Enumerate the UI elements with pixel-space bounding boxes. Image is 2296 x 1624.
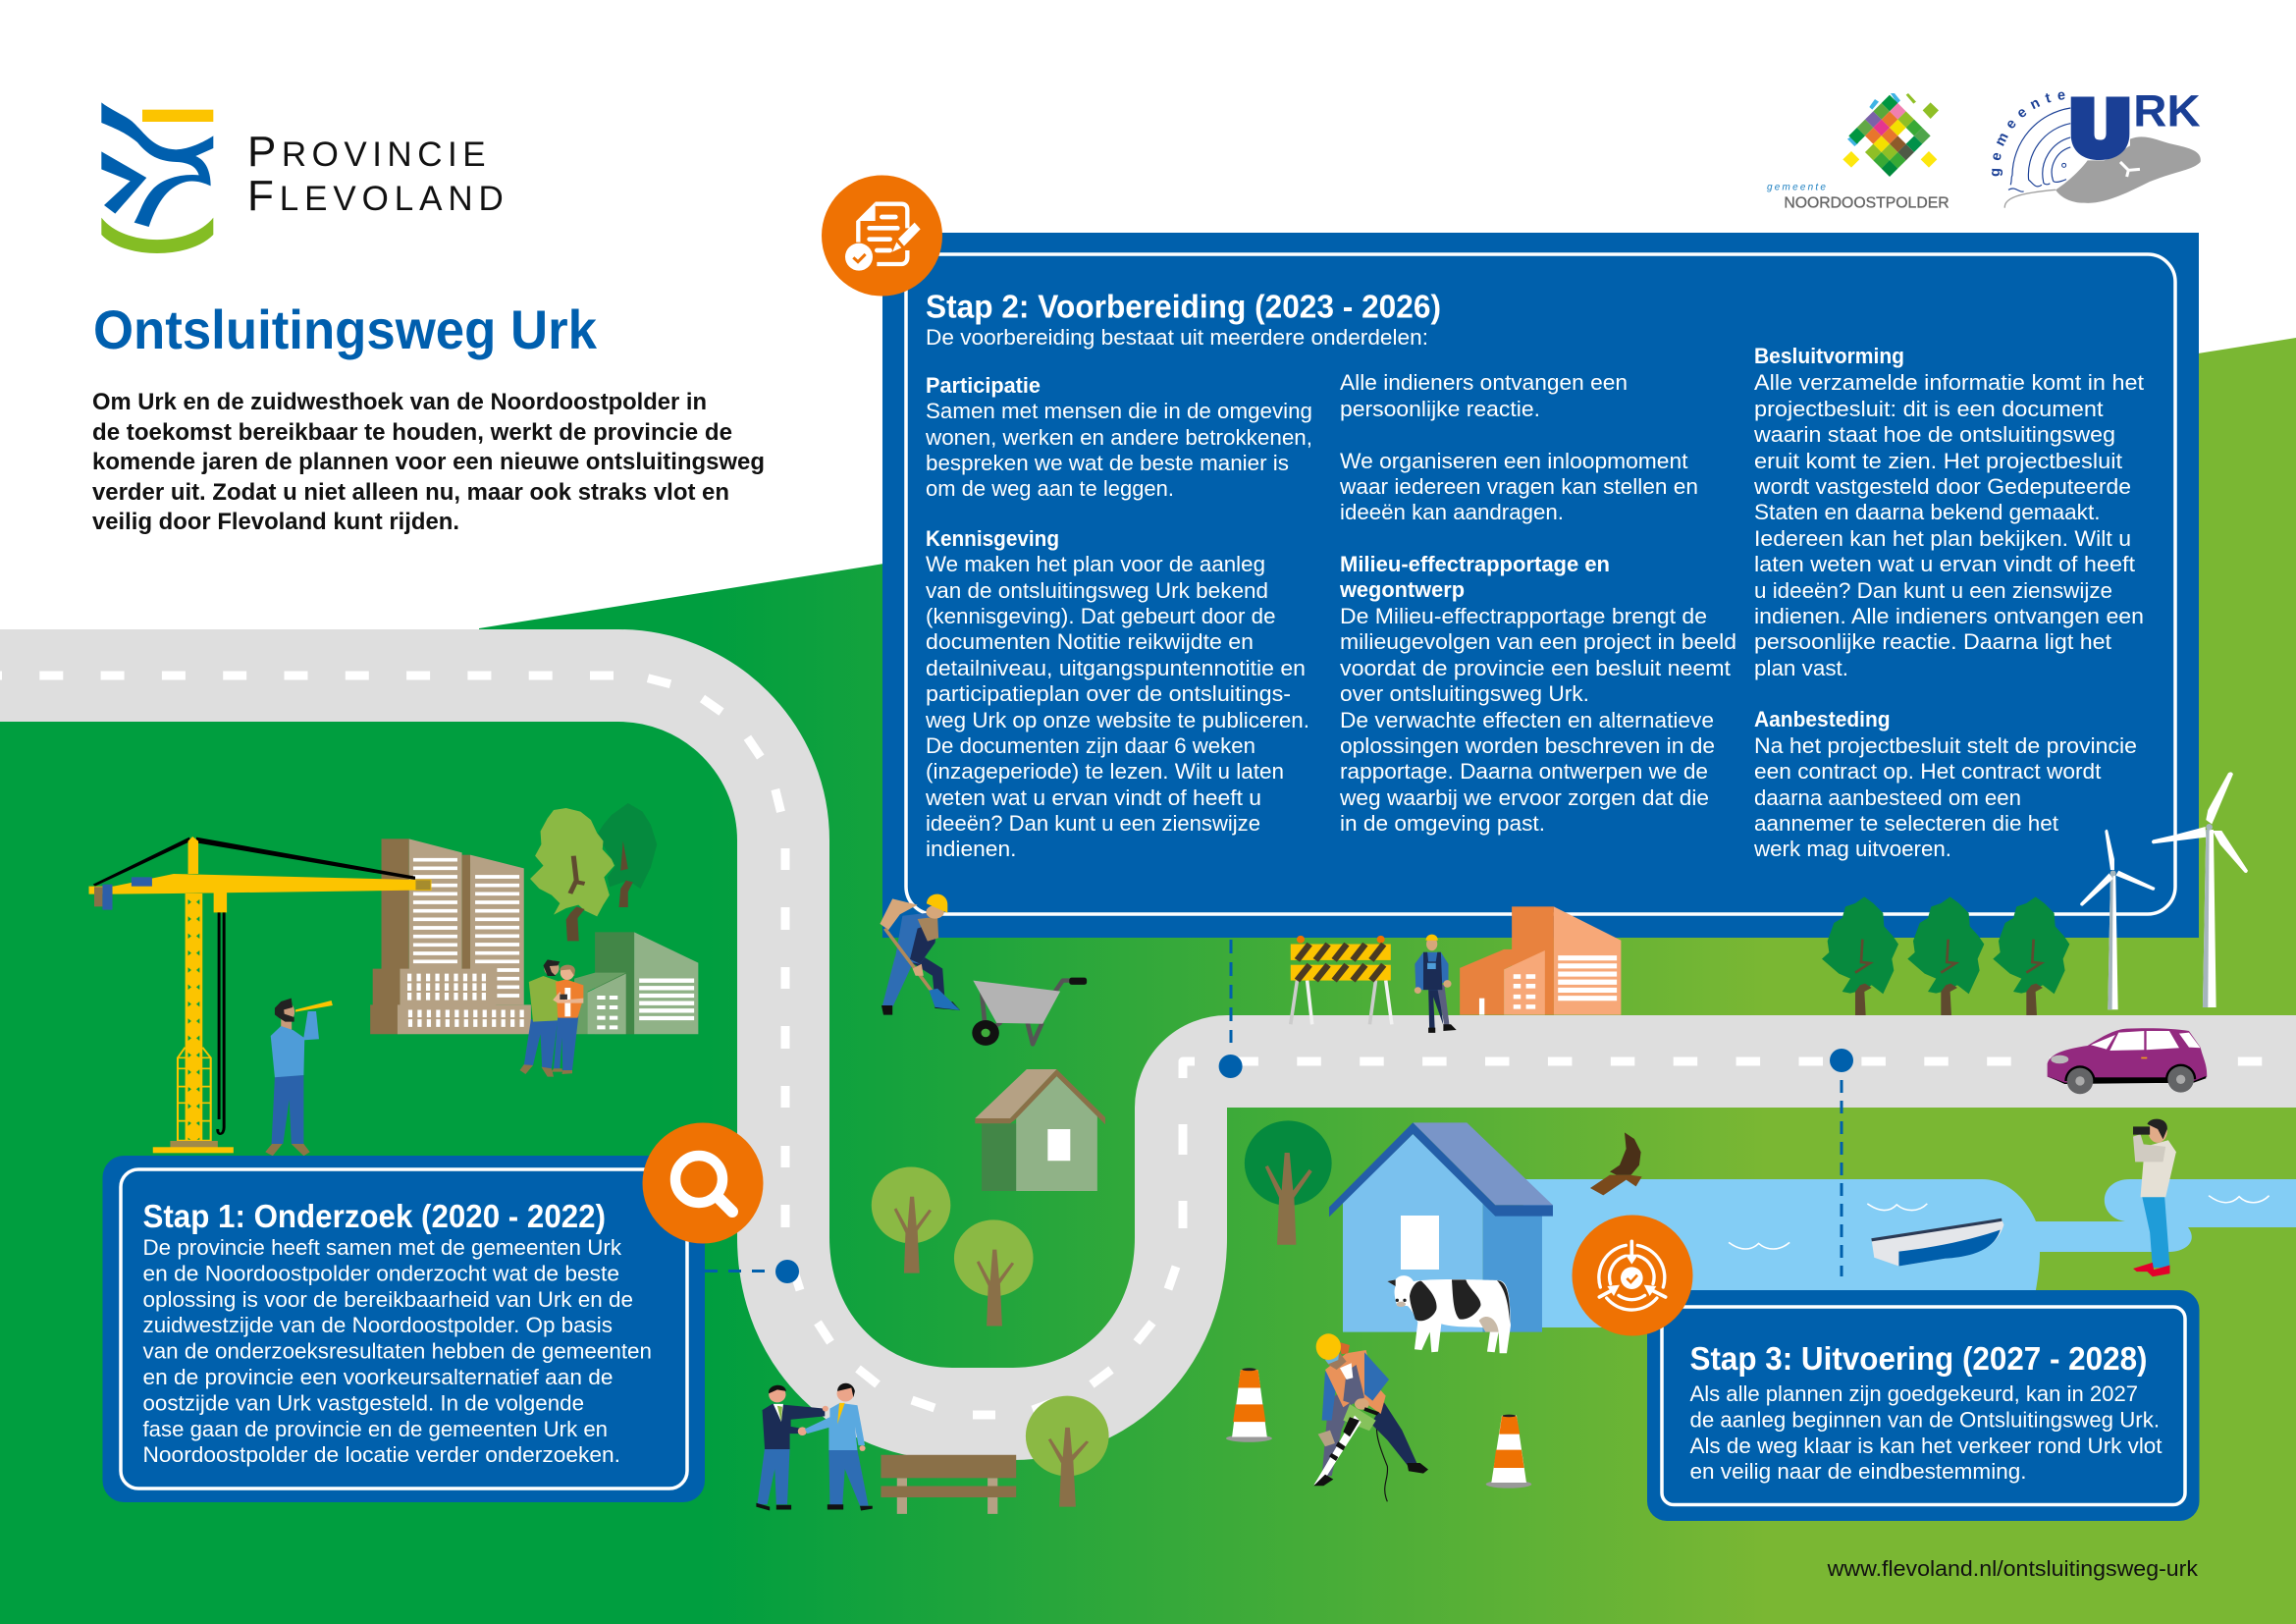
text: Stap 1 body: en de Noordoostpolder onderzocht wat de beste bbox=[143, 1261, 619, 1286]
worker with shovel bbox=[880, 894, 960, 1015]
text column 2: ideeën kan aandragen. bbox=[1340, 500, 1564, 524]
orange buildings bbox=[1460, 906, 1621, 1015]
text column 3: daarna aanbesteed om een bbox=[1754, 785, 2021, 810]
text column 2: milieugevolgen van een project in beeld bbox=[1340, 629, 1736, 654]
text column 3: eruit komt te zien. Het projectbesluit bbox=[1754, 449, 2122, 473]
website url: www.flevoland.nl/ontsluitingsweg-urk bbox=[1827, 1556, 2199, 1581]
text: Stap 3 body: en veilig naar de eindbestemming. bbox=[1690, 1459, 2026, 1484]
connector: Stap 1 to road bbox=[705, 1260, 799, 1283]
cone right bbox=[1486, 1415, 1531, 1489]
wheelbarrow bbox=[972, 978, 1087, 1046]
text column 1: indienen. bbox=[926, 837, 1017, 861]
text column 2: De Milieu-effectrapportage brengt de bbox=[1340, 604, 1707, 628]
cow bbox=[1387, 1275, 1511, 1353]
text column 3: een contract op. Het contract wordt bbox=[1754, 759, 2101, 784]
text: intro Stap 2: De voorbereiding bestaat uit meerdere onderdelen: bbox=[926, 325, 1428, 350]
text column 1: Kennisgeving bbox=[926, 526, 1059, 551]
text column 2: waar iedereen vragen kan stellen en bbox=[1339, 474, 1698, 499]
panel: Stap 1 Onderzoek bbox=[102, 1156, 705, 1502]
text column 2: Alle indieners ontvangen een bbox=[1340, 370, 1628, 395]
heading: Stap 2: Stap 2: Voorbereiding (2023 - 2026) bbox=[926, 289, 1441, 324]
text column 1: (kennisgeving). Dat gebeurt door de bbox=[926, 604, 1276, 628]
heading: Stap 3: Stap 3: Uitvoering (2027 - 2028) bbox=[1690, 1340, 2148, 1377]
text column 1: (inzageperiode) te lezen. Wilt u laten bbox=[926, 759, 1284, 784]
text column 3: Iedereen kan het plan bekijken. Wilt u bbox=[1754, 526, 2131, 551]
logo: Provincie Flevoland: FLEVOLAND bbox=[247, 172, 509, 220]
connector: Stap 3 to road bbox=[1830, 1049, 1853, 1276]
text: Stap 1 body: De provincie heeft samen met de gemeenten Urk bbox=[143, 1235, 622, 1260]
text: Stap 3 body: de aanleg beginnen van de Ontsluitingsweg Urk. bbox=[1690, 1408, 2160, 1433]
text: Stap 1 body bbox=[143, 1235, 652, 1467]
intro text: veilig door Flevoland kunt rijden. bbox=[92, 509, 459, 535]
bench bbox=[881, 1455, 1016, 1514]
text column 1: van de ontsluitingsweg Urk bekend bbox=[926, 578, 1268, 603]
intro text: komende jaren de plannen voor een nieuwe ontsluitingsweg bbox=[92, 449, 765, 475]
text column 1: weg Urk op onze website te publiceren. bbox=[925, 708, 1309, 732]
people shaking hands bbox=[756, 1383, 873, 1511]
text: Stap 3 body bbox=[1690, 1381, 2162, 1484]
text column 3: projectbesluit: dit is een document bbox=[1754, 397, 2103, 421]
text column 2: voordat de provincie een besluit neemt bbox=[1340, 656, 1731, 680]
text column 3: waarin staat hoe de ontsluitingsweg bbox=[1753, 422, 2115, 447]
text column 3: aannemer te selecteren die het bbox=[1754, 811, 2058, 836]
text column 1: De documenten zijn daar 6 weken bbox=[926, 733, 1255, 758]
text column 3: plan vast. bbox=[1754, 656, 1848, 680]
text column 3: laten weten wat u ervan vindt of heeft bbox=[1754, 552, 2135, 576]
worker with jackhammer bbox=[1313, 1333, 1428, 1501]
icon: process cycle with check bbox=[1573, 1216, 1692, 1335]
blue house bbox=[1329, 1122, 1553, 1332]
logo: Provincie Flevoland: PROVINCIE bbox=[247, 128, 491, 176]
text column 2: persoonlijke reactie. bbox=[1340, 397, 1540, 421]
text column 3: Staten en daarna bekend gemaakt. bbox=[1754, 500, 2101, 524]
text column 3: Besluitvorming bbox=[1754, 344, 1904, 368]
couple looking at phone bbox=[520, 959, 583, 1077]
water bbox=[1507, 1179, 2296, 1327]
text column 1: weten wat u ervan vindt of heeft u bbox=[925, 785, 1261, 810]
crane bbox=[89, 837, 431, 1153]
text column 2: Milieu-effectrapportage en bbox=[1340, 552, 1610, 576]
road bbox=[0, 676, 2296, 1415]
text column 3: wordt vastgesteld door Gedeputeerde bbox=[1753, 474, 2131, 499]
intro text: verder uit. Zodat u niet alleen nu, maar ook straks vlot en bbox=[92, 479, 729, 506]
text column 2: in de omgeving past. bbox=[1340, 811, 1545, 836]
bird bbox=[1590, 1132, 1642, 1195]
text column 1: bespreken we wat de beste manier is bbox=[926, 451, 1289, 475]
round trees bbox=[872, 1120, 1332, 1507]
logo: gemeente Noordoostpolder bbox=[1767, 93, 1949, 212]
background landscape bbox=[0, 338, 2296, 1624]
text column 1: ideeën? Dan kunt u een zienswijze bbox=[926, 811, 1260, 836]
title: Ontsluitingsweg Urk bbox=[93, 298, 598, 360]
panel: Stap 2 Voorbereiding bbox=[882, 233, 2199, 938]
green buildings bbox=[574, 932, 698, 1034]
heading: Stap 1: Stap 1: Onderzoek (2020 - 2022) bbox=[143, 1198, 606, 1234]
brown office buildings bbox=[370, 839, 531, 1034]
text column 1: detailniveau, uitgangspuntennotitie en bbox=[926, 656, 1306, 680]
text: Stap 1 body: en de provincie een voorkeursalternatief aan de bbox=[143, 1365, 613, 1389]
text column 1: wonen, werken en andere betrokkenen, bbox=[925, 425, 1312, 450]
logo: gemeente Urk: U bbox=[2072, 86, 2128, 169]
text column 3: werk mag uitvoeren. bbox=[1753, 837, 1951, 861]
text column 3: indienen. Alle indieners ontvangen een bbox=[1754, 604, 2144, 628]
road barrier bbox=[1291, 936, 1392, 1024]
text: Stap 1 body: van de onderzoeksresultaten hebben de gemeenten bbox=[143, 1339, 652, 1364]
text: Stap 1 body: fase gaan de provincie en de gemeenten Urk en bbox=[143, 1417, 608, 1441]
text column 1: We maken het plan voor de aanleg bbox=[926, 552, 1265, 576]
logo: gemeente Noordoostpolder: NOORDOOSTPOLDER bbox=[1784, 195, 1949, 212]
text: Stap 1 body: oplossing is voor de bereikbaarheid van Urk en de bbox=[143, 1287, 633, 1312]
intro text bbox=[92, 389, 765, 535]
text: Stap 3 body: Als de weg klaar is kan het verkeer rond Urk vlot bbox=[1690, 1434, 2162, 1458]
text column 3: Aanbesteding bbox=[1754, 707, 1891, 731]
car bbox=[2048, 1028, 2207, 1094]
icon: magnifying glass bbox=[642, 1123, 764, 1243]
logo: gemeente Urk bbox=[1992, 85, 2201, 208]
person with binoculars bbox=[2133, 1119, 2176, 1276]
panel: Stap 3 Uitvoering bbox=[1647, 1290, 2199, 1521]
text column 2: rapportage. Daarna ontwerpen we de bbox=[1340, 759, 1708, 784]
row of trees bbox=[1822, 896, 2069, 1015]
text column 2: weg waarbij we ervoor zorgen dat die bbox=[1339, 785, 1709, 810]
text: Stap 3 body: Als alle plannen zijn goedgekeurd, kan in 2027 bbox=[1690, 1381, 2138, 1406]
text column 2 bbox=[1339, 370, 1736, 836]
text: Stap 1 body: zuidwestzijde van de Noordoostpolder. Op basis bbox=[143, 1313, 613, 1337]
person with telescope bbox=[265, 999, 333, 1156]
logo: gemeente Urk: gemeente bbox=[1992, 92, 2065, 177]
text column 2: wegontwerp bbox=[1339, 577, 1465, 602]
text column 3 bbox=[1753, 344, 2144, 861]
logo: gemeente Noordoostpolder: gemeente bbox=[1767, 182, 1826, 192]
text column 2: De verwachte effecten en alternatieve bbox=[1340, 708, 1714, 732]
text column 1: participatieplan over de ontsluitings- bbox=[926, 681, 1291, 706]
logo: Provincie Flevoland bbox=[101, 102, 509, 253]
text: Stap 1 body: oostzijde van Urk vastgesteld. In de volgende bbox=[143, 1390, 584, 1416]
wind turbines bbox=[2080, 772, 2248, 1009]
text column 3: persoonlijke reactie. Daarna ligt het bbox=[1754, 629, 2111, 654]
green house bbox=[975, 1069, 1105, 1191]
text column 2: We organiseren een inloopmoment bbox=[1340, 449, 1688, 473]
standing worker bbox=[1415, 935, 1457, 1033]
text column 1 bbox=[925, 373, 1312, 861]
trees behind buildings bbox=[530, 803, 657, 941]
icon: document with pencil bbox=[822, 175, 942, 297]
intro text: de toekomst bereikbaar te houden, werkt de provincie de bbox=[92, 419, 732, 446]
text column 1: Samen met mensen die in de omgeving bbox=[926, 399, 1312, 423]
text column 2: oplossingen worden beschreven in de bbox=[1340, 733, 1715, 758]
intro text: Om Urk en de zuidwesthoek van de Noordoostpolder in bbox=[92, 389, 707, 415]
text: Stap 1 body: Noordoostpolder de locatie verder onderzoeken. bbox=[143, 1442, 620, 1467]
logo: gemeente Urk: RK bbox=[2133, 85, 2201, 135]
cone left bbox=[1226, 1368, 1272, 1442]
text column 3: u ideeën? Dan kunt u een zienswijze bbox=[1754, 578, 2112, 603]
connector: Stap 2 to road bbox=[1219, 940, 1243, 1078]
text column 2: over ontsluitingsweg Urk. bbox=[1340, 681, 1589, 706]
text column 1: om de weg aan te leggen. bbox=[926, 476, 1174, 501]
text column 3: Alle verzamelde informatie komt in het bbox=[1754, 370, 2144, 395]
boat and waves bbox=[1729, 1196, 2269, 1266]
text column 1: documenten Notitie reikwijdte en bbox=[926, 629, 1254, 654]
text column 3: Na het projectbesluit stelt de provincie bbox=[1754, 733, 2137, 758]
text column 1: Participatie bbox=[926, 373, 1041, 398]
